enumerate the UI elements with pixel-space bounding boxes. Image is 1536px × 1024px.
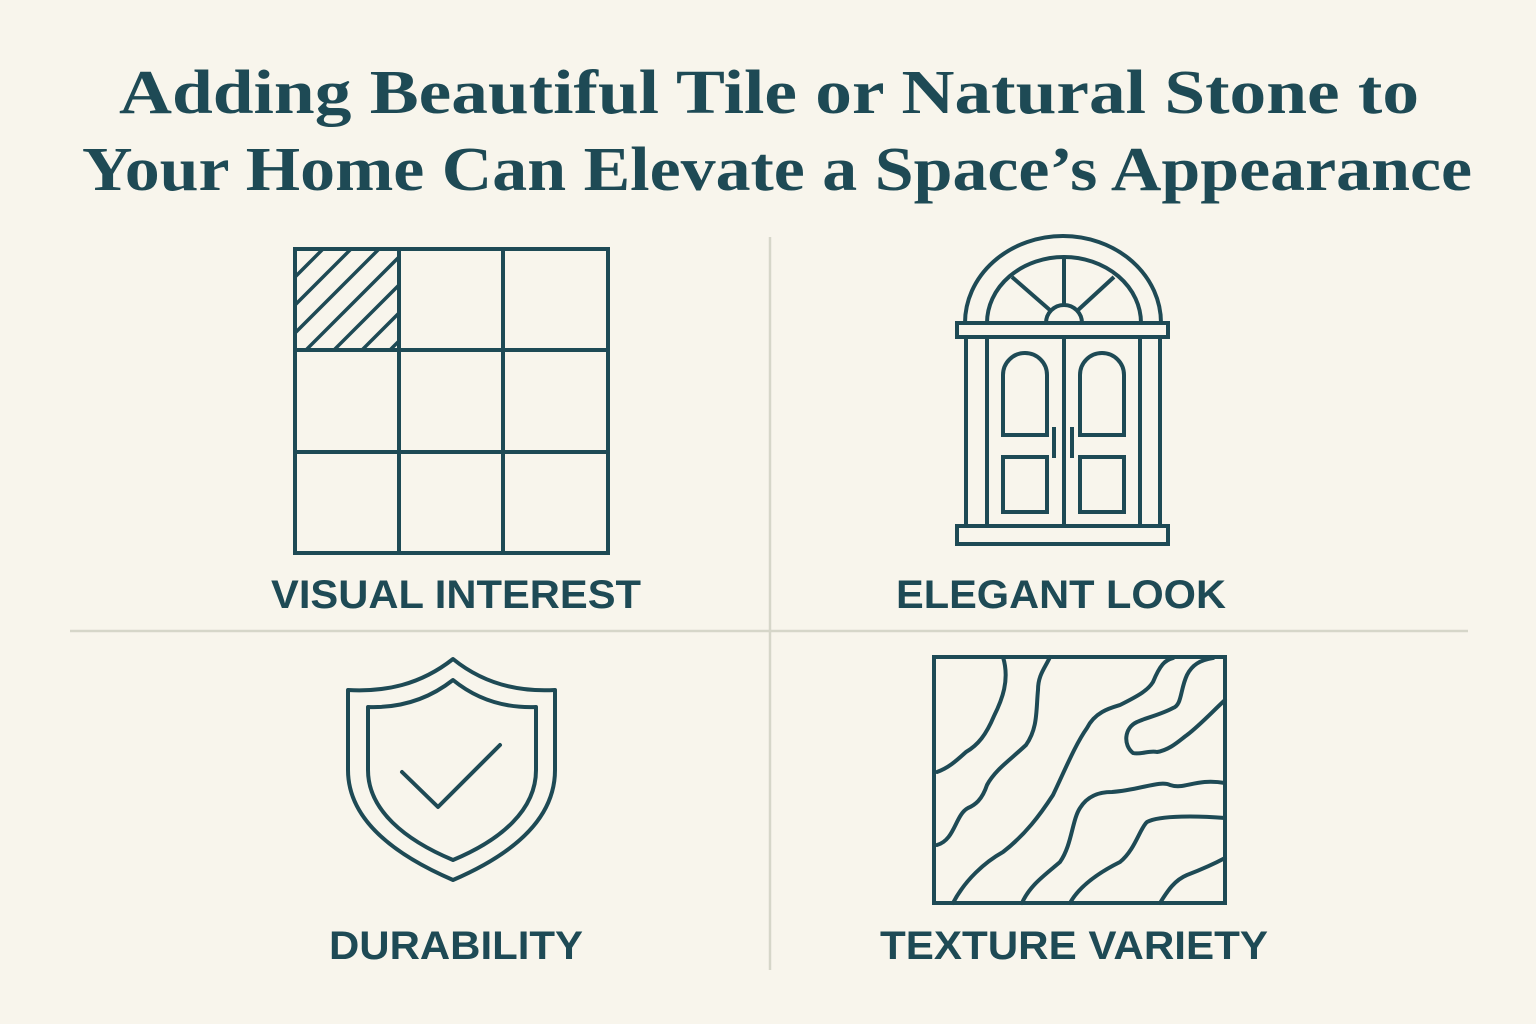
- panel: elegant look: [896, 236, 1226, 617]
- icon: arched door: [957, 236, 1168, 544]
- label: visual interest: VISUAL INTEREST: [271, 573, 641, 617]
- title: Your Home Can Elevate a Space’s Appearance: [82, 136, 1472, 204]
- panel: visual interest: [271, 247, 641, 608]
- panel: texture variety: [880, 657, 1268, 968]
- title: Adding Beautiful Tile or Natural Stone to: [119, 59, 1419, 127]
- icon: stone texture: [934, 657, 1225, 903]
- icon: tile grid: [293, 247, 610, 555]
- panel: durability: [329, 659, 583, 968]
- icon: shield with check: [348, 659, 555, 880]
- label: durability: DURABILITY: [329, 924, 583, 968]
- label: elegant look: ELEGANT LOOK: [896, 573, 1226, 617]
- title: [82, 59, 1472, 204]
- label: texture variety: TEXTURE VARIETY: [880, 924, 1268, 968]
